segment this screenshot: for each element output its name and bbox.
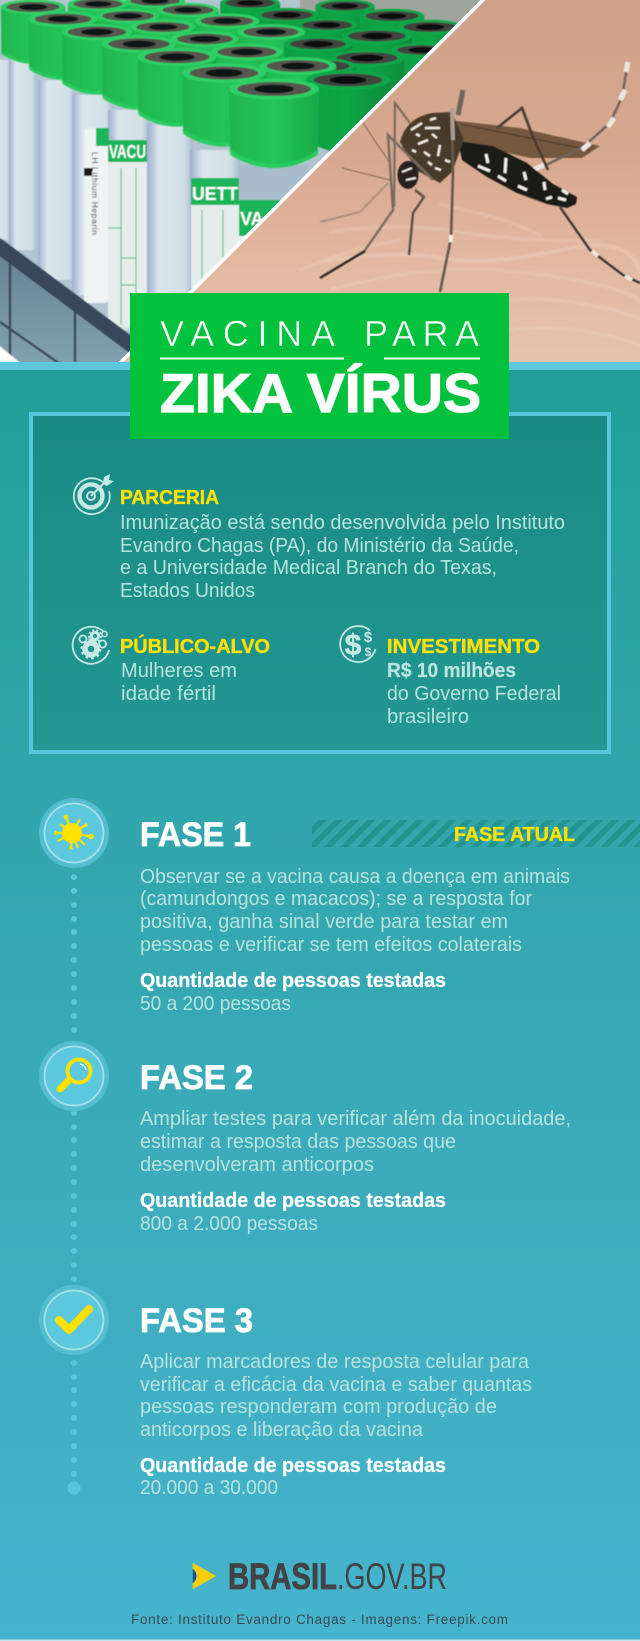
tube labels: VA [240,209,264,229]
timeline dots [68,874,80,1494]
text: fase 2 description: desenvolveram anticorpos [140,1154,374,1176]
logo: brasil.gov.br: BRASIL [228,1556,337,1597]
antennae [342,123,390,180]
cyan strip [0,362,640,370]
icon: magnifier [39,1041,109,1111]
title line: para: PARA [364,313,479,354]
text: publico-alvo description: idade fértil [121,683,216,705]
icon: money: $ [365,645,372,659]
rack [0,236,134,366]
icon: money: $ [345,629,362,662]
text: investimento description: brasileiro [387,706,469,728]
abdomen spots [478,154,568,200]
icon: money: $ [364,629,373,646]
photo: skin background [124,0,640,362]
text: fase 3 quantity: 20.000 a 30.000 [140,1477,278,1499]
icon: check mark [39,1285,109,1355]
panel: project summary [31,414,609,752]
text: fase 3 quantity [140,1455,446,1499]
text: fase 3 description: anticorpos e liberação da vacina [140,1419,424,1441]
diagonal divider [120,0,484,363]
source line: Fonte: Instituto Evandro Chagas - Imagens: Freepik.com [131,1612,508,1627]
tube labels [84,128,289,327]
logo: brasil.gov.br [193,1556,447,1597]
tag: fase atual: FASE ATUAL [454,824,575,846]
hero photo collage [0,0,640,366]
head [398,161,418,189]
text: fase 3 description: pessoas responderam com produção de [140,1396,497,1418]
front legs [394,103,410,207]
label: vacuette third [238,200,281,236]
label: lithium heparin [84,128,108,303]
text: parceria description: Imunização está sendo desenvolvida pelo Instituto [120,512,565,534]
photo: test tubes [0,0,490,366]
icon: logo arrow [193,1563,216,1589]
title line: vacina: VACINA [160,313,335,354]
icon: money [340,626,376,662]
heading: fase 3: FASE 3 [140,1302,253,1340]
icon: target [74,474,114,514]
logo: brasil.gov.br: .GOV.BR [337,1556,447,1597]
text: fase 1 quantity [140,970,446,1015]
heading: fase 2: FASE 2 [140,1059,253,1097]
text: investimento description: R$ 10 milhões [387,660,516,682]
text: parceria description [120,512,565,602]
text: fase 1 description: Observar se a vacina causa a doença em animais [140,866,570,888]
phase 3 [39,1285,532,1499]
text: fase 3 description: Aplicar marcadores de resposta celular para [140,1351,530,1373]
text: fase 1 quantity: 50 a 200 pessoas [140,993,291,1015]
thorax [400,112,464,183]
wing [448,120,600,158]
icon: virus [39,798,109,868]
tube bodies [0,60,308,350]
text: fase 2 quantity [140,1190,446,1235]
text: fase 3 description: verificar a eficácia da vacina e saber quantas [140,1374,532,1396]
text: fase 2 description: estimar a resposta das pessoas que [140,1131,456,1153]
label: vacuette [108,140,147,327]
text: publico-alvo description: Mulheres em [121,660,237,682]
heading: fase 1: FASE 1 [140,816,251,854]
title line: zika virus: ZIKA VÍRUS [160,362,481,424]
skin ridges [300,205,640,345]
phase 2 [39,1041,571,1235]
tube labels: UETT [192,184,238,204]
heading: publico-alvo: PÚBLICO-ALVO [120,634,270,658]
text: fase 1 description: (camundongos e macacos); se a resposta for [140,888,532,910]
bottom edge [0,1640,640,1641]
hind leg to ground [560,207,640,283]
tube labels: LH Lithium Heparin [90,152,100,235]
text: publico-alvo description [121,660,237,705]
blurred rear leg [320,183,388,222]
backdrop [0,0,330,336]
text: fase 3 quantity: Quantidade de pessoas testadas [140,1455,446,1477]
thorax spots [411,118,450,170]
text: parceria description: Evandro Chagas (PA), do Ministério da Saúde, [120,535,519,557]
photo: mosquito [320,62,640,292]
text: fase 1 description [140,866,570,956]
title box [130,293,509,439]
phase 1 [39,798,640,1015]
text: fase 3 description [140,1351,532,1441]
proboscis [409,190,424,255]
text: investimento description: do Governo Federal [387,683,561,705]
front row caps [1,0,319,168]
text: fase 1 quantity: Quantidade de pessoas testadas [140,970,446,992]
hind leg raised [544,72,628,167]
text: fase 2 quantity: Quantidade de pessoas testadas [140,1190,446,1212]
abdomen [458,141,577,208]
text: fase 1 description: pessoas e verificar se tem efeitos colaterais [140,934,522,956]
label: vacuette second [190,204,240,288]
text: fase 2 description: Ampliar testes para verificar além da inocuidade, [140,1108,571,1130]
heading: parceria: PARCERIA [120,487,219,509]
tube labels: VACU [109,142,146,162]
text: fase 1 description: positiva, ganha sinal verde para testar em [140,911,508,933]
text: fase 2 description [140,1108,571,1176]
text: investimento description [387,660,561,728]
back row caps [68,0,462,153]
text: parceria description: e a Universidade Medical Branch do Texas, [120,557,497,579]
icon: gears [73,627,109,664]
tag: fase atual [312,820,640,847]
middle leg raised [497,108,548,170]
text: fase 2 quantity: 800 a 2.000 pessoas [140,1213,318,1235]
heading: investimento: INVESTIMENTO [387,636,540,658]
text: parceria description: Estados Unidos [120,580,255,602]
